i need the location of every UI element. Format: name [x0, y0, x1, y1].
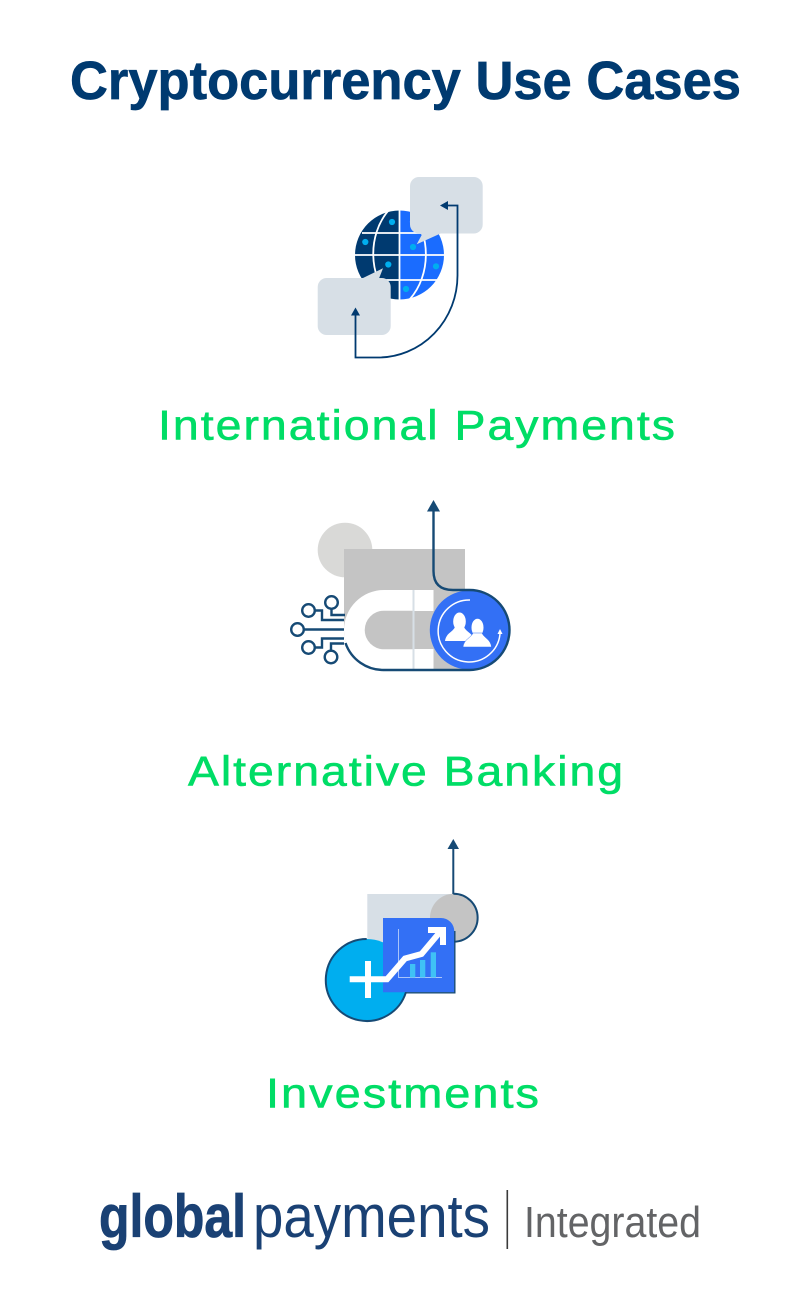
icon: international payments globe with speech bubbles	[318, 177, 483, 358]
ring arrow	[438, 600, 500, 662]
customers glyph	[445, 612, 502, 647]
title: Cryptocurrency Use Cases	[70, 51, 741, 111]
grey background circle	[318, 523, 372, 577]
heading: Investments: Investments	[266, 1070, 541, 1116]
heading: Alternative Banking: Alternative Banking	[188, 748, 625, 794]
icon: alternative banking magnet with customers	[291, 500, 510, 670]
logo: Global Payments Integrated: Integrated	[524, 1198, 701, 1247]
circuit nodes	[291, 596, 345, 663]
magnet	[344, 590, 434, 670]
logo: Global Payments Integrated: global	[99, 1183, 246, 1250]
speech bubble: bottom left	[318, 268, 391, 335]
logo: Global Payments Integrated	[99, 1183, 701, 1250]
blue customer circle	[430, 590, 509, 670]
chart card	[383, 918, 455, 993]
globe	[355, 210, 444, 300]
light background square	[367, 894, 454, 992]
heading: International Payments: International Payments	[158, 402, 677, 448]
speech bubble: top right	[410, 177, 483, 244]
arrow: outline rising from magnet	[346, 500, 510, 670]
arrow: curved exchange path	[351, 201, 458, 358]
grey circle with arrow	[430, 839, 478, 942]
logo: Global Payments Integrated: payments	[253, 1183, 490, 1250]
icon: investments growth chart	[326, 839, 478, 1021]
blue plus circle	[326, 939, 408, 1021]
grey background square	[344, 549, 465, 670]
plus and rising arrow	[350, 930, 443, 998]
